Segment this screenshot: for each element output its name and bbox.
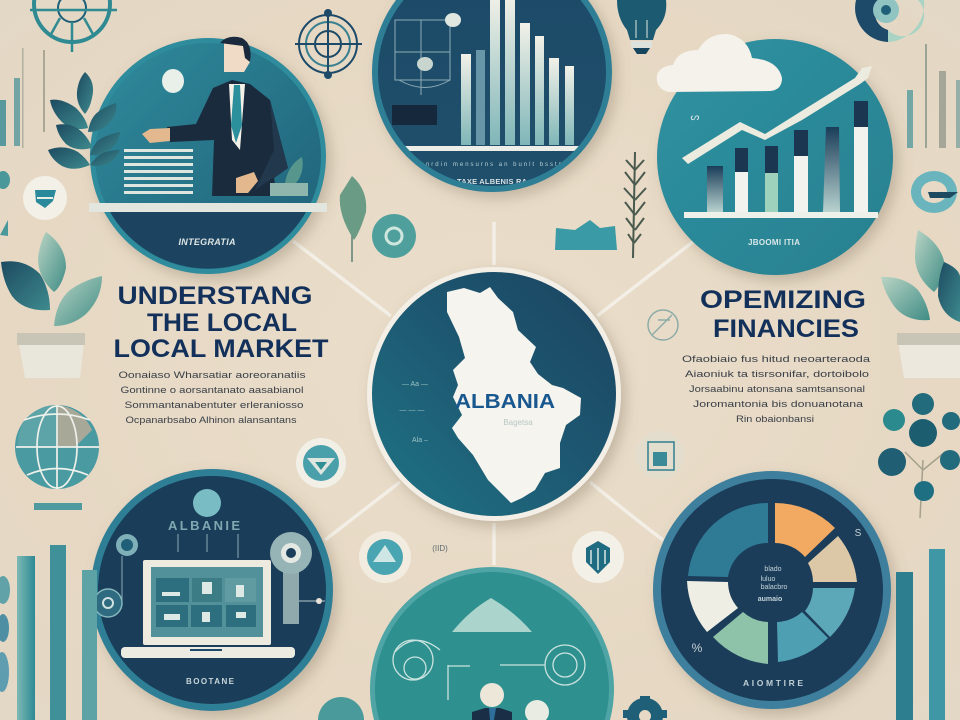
body text left: Gontinne o aorsantanato aasabianol xyxy=(120,385,304,395)
badge: teal coin xyxy=(372,214,416,258)
lower navy band xyxy=(109,210,307,269)
icon: teal drop xyxy=(193,489,221,517)
diagram: circle right xyxy=(448,645,585,700)
decorative right mini chart xyxy=(907,44,960,148)
panel: leadership network xyxy=(370,567,614,720)
caption lines: tonrdin mensurns an bunlt bsstns xyxy=(417,162,567,168)
panel: market analyst xyxy=(89,37,327,274)
small glyph left: % xyxy=(692,641,703,655)
chart bars xyxy=(461,0,574,145)
side badge xyxy=(94,589,122,617)
plant: right pot xyxy=(881,230,960,378)
donut centre text: blado xyxy=(764,566,782,573)
body text left: Sommantanabentuter erleraniosso xyxy=(124,400,304,410)
small badge xyxy=(116,534,138,556)
chart baseline xyxy=(398,146,589,151)
leaf sprig centre left xyxy=(340,176,366,262)
second head xyxy=(525,700,549,720)
small map annotations: Ala – xyxy=(412,437,428,444)
badge: shield xyxy=(572,531,624,583)
cloud xyxy=(657,34,782,92)
small map annotations xyxy=(400,381,428,444)
body text left xyxy=(118,370,306,425)
laptop base xyxy=(121,647,295,658)
icon: gear bottom xyxy=(623,696,667,720)
panel caption: BOOTANE xyxy=(186,677,235,686)
heading: understanding the local market: UNDERSTANG xyxy=(118,282,312,310)
decorative left edge shapes xyxy=(0,171,10,236)
plant: left pot xyxy=(1,232,102,378)
icon: target top xyxy=(295,10,362,78)
small glyph: ᔕ xyxy=(691,112,700,123)
bottom edge circle xyxy=(318,697,364,720)
figure: executive xyxy=(472,683,512,720)
wireframe diagram xyxy=(395,20,450,95)
decorative left edge blobs xyxy=(0,576,10,692)
panel: optimizing finances chart xyxy=(657,34,893,275)
donut centre text: luluo xyxy=(761,576,775,583)
small map annotations: — Aa — xyxy=(402,381,428,388)
donut centre text: aumaio xyxy=(758,596,782,603)
icon: roof pyramid xyxy=(452,598,532,632)
heading: optimizing finances: OPEMIZING xyxy=(700,286,866,314)
icon: speech bubble xyxy=(162,69,184,93)
body text left: Ocpanarbsabo Alhinon alansantans xyxy=(126,415,297,425)
top right donut icon xyxy=(855,0,924,42)
map label: ALBANIA xyxy=(455,391,555,413)
paper stack xyxy=(124,149,193,194)
body text right: Aiaoniuk ta tisrsonifar, dortoibolo xyxy=(685,369,869,379)
segment white xyxy=(687,581,738,632)
diagram: circle left xyxy=(393,640,440,680)
icon: globe xyxy=(15,405,99,489)
decorative left mini chart xyxy=(0,48,45,148)
small Albania label: ALBANIE xyxy=(168,518,240,533)
badge: emblem left xyxy=(296,438,346,488)
flower icon right xyxy=(878,393,960,518)
body text right: Jorsaabinu atonsana samtsansonal xyxy=(689,384,865,394)
badge: shield icon xyxy=(23,176,67,220)
body text right: Joromantonia bis donuanotana xyxy=(693,399,863,409)
plant: left of analyst xyxy=(48,72,120,169)
decorative bars bottom right xyxy=(896,549,945,720)
panel: digital laptop xyxy=(91,469,333,711)
heading: optimizing finances: FINANCIES xyxy=(713,315,859,343)
chart shelf xyxy=(684,212,878,218)
badge: teal mountain xyxy=(359,531,411,583)
segment teal xyxy=(777,612,828,662)
faint label: Bagetsa xyxy=(503,418,533,427)
figure: businessman xyxy=(142,37,288,196)
body text right: Ofaobiaio fus hitud neoarteraoda xyxy=(682,354,870,364)
growth arrow xyxy=(682,66,872,164)
map: Albania silhouette xyxy=(447,287,581,503)
cup on desk xyxy=(270,183,308,196)
chart bars xyxy=(707,101,868,212)
panel: Albania map hub xyxy=(367,267,621,521)
segment orange xyxy=(775,503,835,557)
body text right: Rin obaionbansi xyxy=(736,414,814,424)
body text right xyxy=(682,354,870,424)
small glyph label: (IID) xyxy=(432,544,448,553)
segment blue xyxy=(688,503,768,577)
segment light blue xyxy=(805,588,855,637)
icon: mountain xyxy=(555,220,617,250)
fern sprig xyxy=(624,152,646,258)
panel: budget donut chart xyxy=(653,471,891,709)
segment tan xyxy=(808,536,857,582)
panel: top centre bar chart: TAXE ALBENIS RA xyxy=(457,177,528,186)
heading: optimizing finances xyxy=(700,286,866,343)
body text left: Oonaiaso Wharsatiar aoreoranatiis xyxy=(118,370,306,380)
small map annotations: — — — xyxy=(400,407,424,414)
donut centre text xyxy=(758,566,788,603)
icon: light bulb xyxy=(617,0,666,54)
decorative bars bottom left xyxy=(17,545,97,720)
laptop screen xyxy=(143,560,271,645)
connector lines xyxy=(293,222,694,565)
magnifier xyxy=(270,532,312,624)
panel caption: AIOMTIRE xyxy=(743,678,803,688)
icon: G badge right xyxy=(911,171,958,213)
globe underline xyxy=(34,503,82,510)
desk shelf xyxy=(89,203,327,212)
small capsule xyxy=(445,13,461,27)
segment green xyxy=(713,612,768,664)
panel caption: INTEGRATIA xyxy=(178,237,236,247)
donut centre text: balacbro xyxy=(761,584,788,591)
small faint icon near right heading xyxy=(648,310,678,340)
heading: understanding the local market: THE LOCAL xyxy=(147,309,297,337)
faint photo badge xyxy=(636,431,684,479)
panel caption: JBOOMI ITIA xyxy=(748,238,800,247)
heading: understanding the local market: LOCAL MARKET xyxy=(114,335,328,363)
heading: understanding the local market xyxy=(114,282,328,363)
small glyph right: S xyxy=(855,528,862,539)
panel: top centre bar chart xyxy=(372,0,612,192)
icon: compass wheel top left xyxy=(30,0,117,52)
connector threads xyxy=(122,534,238,600)
